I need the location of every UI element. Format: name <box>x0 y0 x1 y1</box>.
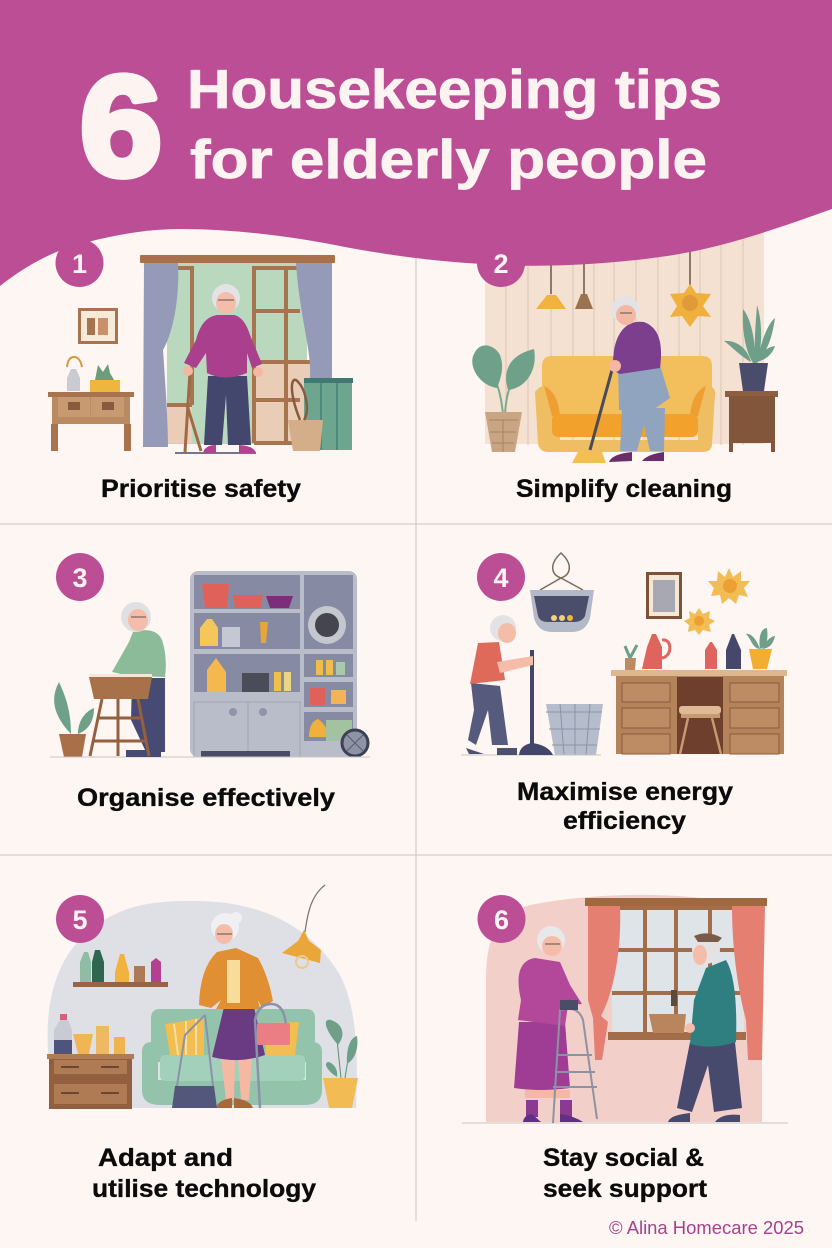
left plant <box>472 345 535 452</box>
table <box>48 392 134 451</box>
right curtain <box>296 263 332 378</box>
number badge 4 <box>477 553 525 601</box>
elderly woman with cane <box>175 284 263 453</box>
header band with wave <box>0 0 832 286</box>
big numeral 6: 6 <box>80 47 162 206</box>
plant <box>323 1020 358 1108</box>
curtains <box>588 906 765 1060</box>
window <box>167 262 310 444</box>
background blob <box>48 901 357 1108</box>
hanging device <box>530 553 594 632</box>
picture frame <box>78 308 118 344</box>
wall panelling <box>485 228 764 445</box>
copyright footer: © Alina Homecare 2025 <box>609 1218 804 1238</box>
number badge 2: 2 <box>493 249 509 279</box>
label 1: Prioritise safety <box>101 475 301 503</box>
picture <box>646 572 682 619</box>
label 5: Adapt and <box>98 1144 233 1172</box>
ground line <box>50 756 370 758</box>
number badge 1: 1 <box>72 249 87 279</box>
window <box>585 898 767 1040</box>
shelf items <box>200 584 352 741</box>
panel 3 illustration: storage unit and woman with basket <box>50 571 370 757</box>
title <box>80 47 722 206</box>
elderly woman with mop <box>572 296 670 463</box>
title line 2: for elderly people <box>190 128 707 190</box>
panel 6 illustration: pink wall, window, two people <box>462 895 788 1123</box>
label 3: Organise effectively <box>77 784 335 812</box>
number badge 6 <box>478 895 526 943</box>
desk items <box>625 628 775 670</box>
elderly woman with basket on stool <box>89 602 166 757</box>
man with basket <box>668 933 742 1122</box>
sofa <box>142 1009 322 1105</box>
label 4: Maximise energy <box>517 778 733 806</box>
number badge 5: 5 <box>72 905 88 935</box>
panel 5 illustration: living room with vacuum and walker <box>47 885 358 1109</box>
number badge 3 <box>56 553 104 601</box>
elderly woman with plunger <box>466 615 553 755</box>
number badge 1 <box>56 239 104 287</box>
panel 4 illustration: hanging device, desk, woman with plunger mop <box>461 553 787 755</box>
number badge 5 <box>56 895 104 943</box>
number badge 4: 4 <box>493 563 509 593</box>
basket <box>649 990 686 1033</box>
left curtain <box>143 263 178 447</box>
pendant lamp <box>282 885 325 968</box>
side table and plant <box>724 305 778 452</box>
elderly woman with vacuum and walker <box>172 912 290 1108</box>
number badge 2 <box>477 239 525 287</box>
lamp and plant <box>67 357 120 392</box>
label 6 <box>543 1144 708 1203</box>
label 2: Simplify cleaning <box>516 475 732 503</box>
title line 1: Housekeeping tips <box>187 58 722 120</box>
dresser <box>47 1054 134 1109</box>
wheel <box>342 730 368 756</box>
label 4 <box>517 778 733 835</box>
plant <box>54 682 94 757</box>
label 5: utilise technology <box>92 1175 316 1203</box>
desk <box>611 670 787 754</box>
lamps and star ornament <box>536 245 711 327</box>
sofa <box>535 356 715 452</box>
storage cabinet <box>190 571 357 757</box>
wall shelf and bottles <box>73 950 168 987</box>
pink wall <box>486 895 762 1122</box>
waste basket <box>546 704 603 755</box>
label 6: Stay social & <box>543 1144 704 1172</box>
ground line <box>462 1122 788 1124</box>
woman with walker <box>514 926 597 1123</box>
bin and basket <box>288 378 353 451</box>
label 6: seek support <box>543 1175 708 1203</box>
dresser items <box>54 1014 125 1054</box>
ground line <box>461 754 601 756</box>
panel 2 illustration: living room with mop <box>472 228 778 463</box>
number badge 3: 3 <box>72 563 88 593</box>
curtain rod <box>140 255 335 263</box>
number badge 6: 6 <box>494 905 509 935</box>
panel 1 illustration: window, table, woman with cane <box>48 255 353 453</box>
sun decorations <box>684 568 750 635</box>
label 4: efficiency <box>563 807 686 835</box>
label 5 <box>92 1144 316 1203</box>
